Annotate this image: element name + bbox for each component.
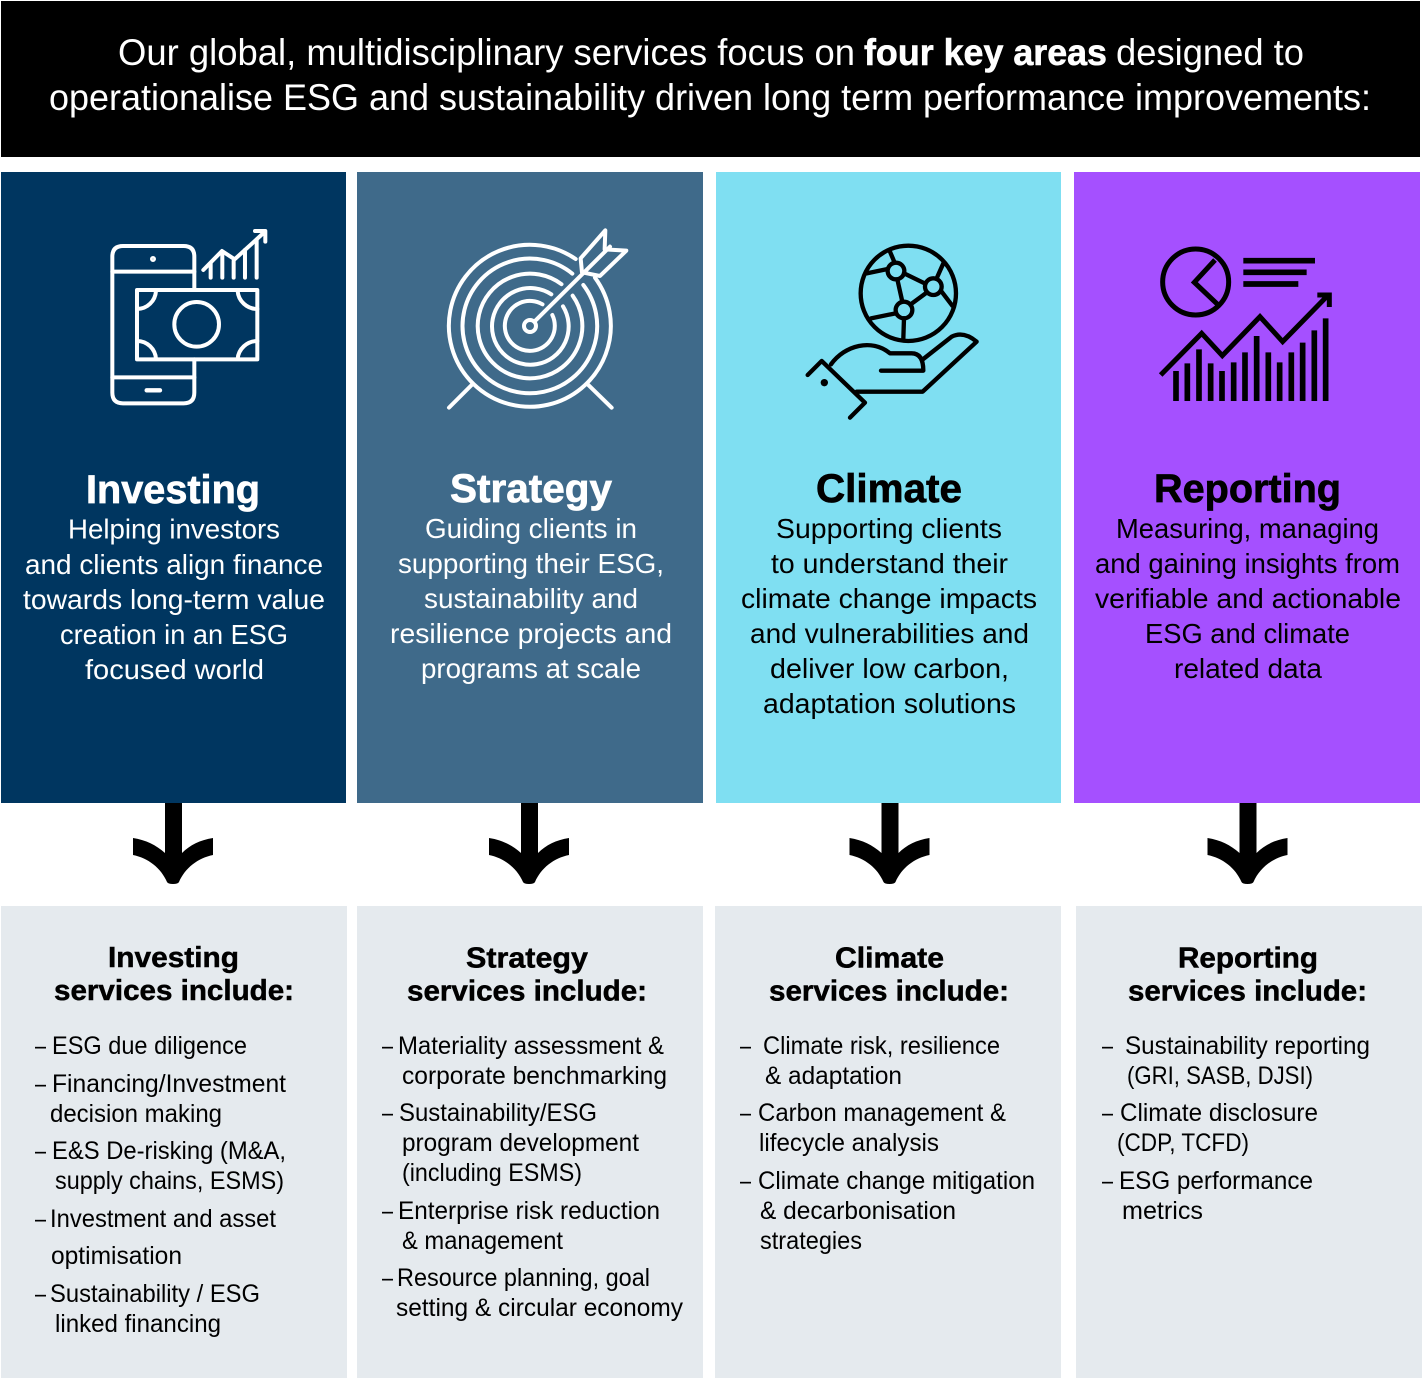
header banner: designed to [1116, 32, 1304, 73]
text: strategy description [390, 513, 672, 684]
text: climate description: to understand their [771, 548, 1008, 579]
panel: investing [1, 172, 346, 803]
text: reporting description: related data [1174, 653, 1322, 684]
arrow: investing [133, 803, 213, 884]
text: investing description: Helping investors [68, 514, 280, 544]
list: investing services: ESG due diligence [52, 1032, 247, 1060]
header banner: four key areas [864, 32, 1107, 73]
list: strategy services: Resource planning, goal [397, 1264, 650, 1292]
list: investing services: Sustainability / ESG [50, 1280, 260, 1308]
list: climate services: Climate risk, resilience [763, 1032, 1000, 1060]
list: climate services: Carbon management & [758, 1099, 1006, 1127]
list: climate services [740, 1032, 1035, 1255]
text: strategy description: sustainability and [424, 583, 638, 614]
list: investing services: linked financing [55, 1310, 221, 1338]
heading: climate services include: services include: [769, 976, 1009, 1008]
heading: reporting services include: Reporting [1178, 942, 1318, 974]
panel: reporting [1074, 172, 1420, 803]
text: investing description: towards long-term value [23, 584, 325, 615]
list: investing services: Financing/Investment [52, 1070, 286, 1098]
heading: strategy services include: Strategy [466, 942, 588, 974]
text: investing description: creation in an ESG [60, 619, 288, 650]
list: strategy services: – [382, 1032, 393, 1060]
list: reporting services [1102, 1032, 1370, 1225]
heading: investing services include: Investing [108, 942, 239, 974]
heading: Investing: Investing [86, 468, 260, 512]
list: reporting services: (CDP, TCFD) [1117, 1129, 1249, 1157]
list: strategy services: – [382, 1264, 393, 1292]
text: strategy description: resilience projects and [390, 618, 672, 649]
list: strategy services: Sustainability/ESG [399, 1099, 597, 1127]
text: investing description: focused world [85, 654, 264, 685]
heading: climate services include: Climate [835, 942, 944, 974]
list: strategy services: program development [402, 1129, 639, 1157]
list: investing services: – [35, 1032, 46, 1060]
heading: Reporting: Reporting [1154, 467, 1341, 511]
text: strategy description: supporting their ESG, [398, 548, 664, 579]
list: reporting services: ESG performance [1119, 1167, 1313, 1195]
list: strategy services [382, 1032, 683, 1322]
text: reporting description: Measuring, managing [1116, 513, 1379, 544]
text: reporting description: ESG and climate [1145, 618, 1350, 649]
panel: climate [716, 172, 1061, 803]
list: strategy services: (including ESMS) [402, 1159, 582, 1187]
list: investing services: optimisation [51, 1242, 182, 1270]
list: investing services: – [35, 1280, 46, 1308]
list: investing services: Investment and asset [50, 1205, 276, 1233]
list: reporting services: metrics [1122, 1197, 1203, 1225]
icon: phone with banknote and chart [112, 231, 265, 403]
text: reporting description [1095, 513, 1401, 684]
heading: climate services include [769, 942, 1009, 1008]
list: investing services: decision making [50, 1100, 222, 1128]
text: reporting description: and gaining insights from [1095, 548, 1400, 579]
arrow: strategy [489, 803, 569, 884]
list: climate services: lifecycle analysis [759, 1129, 939, 1157]
text: climate description: adaptation solutions [763, 688, 1016, 719]
list: climate services: – [740, 1099, 751, 1127]
list: strategy services: Materiality assessment & [398, 1032, 664, 1060]
panel: strategy [357, 172, 703, 803]
heading: reporting services include [1128, 942, 1367, 1008]
icon: target with arrow [449, 230, 626, 408]
list: reporting services: – [1102, 1167, 1113, 1195]
text: investing description [23, 514, 325, 685]
header banner: operationalise ESG and sustainability driven long term performance improvements: [49, 77, 1371, 118]
list: investing services: E&S De-risking (M&A, [52, 1137, 286, 1165]
list: reporting services: Sustainability reporting [1125, 1032, 1370, 1060]
heading: investing services include [54, 942, 294, 1007]
list: climate services: & decarbonisation [760, 1197, 956, 1225]
header banner [1, 1, 1420, 157]
list: strategy services: – [382, 1197, 393, 1225]
list: strategy services: – [382, 1099, 393, 1127]
list: investing services: supply chains, ESMS) [55, 1167, 284, 1195]
panel: reporting services [1076, 906, 1422, 1378]
list: investing services: – [35, 1137, 46, 1165]
text: climate description: Supporting clients [776, 513, 1002, 544]
list: strategy services: Enterprise risk reduction [398, 1197, 660, 1225]
list: investing services: – [35, 1070, 46, 1098]
text: strategy description: Guiding clients in [425, 513, 637, 544]
heading: Strategy: Strategy [450, 467, 613, 511]
text: reporting description: verifiable and actionable [1095, 583, 1401, 614]
list: investing services [35, 1032, 286, 1338]
heading: strategy services include [407, 942, 647, 1008]
list: climate services: – [740, 1167, 751, 1195]
text: investing description: and clients align finance [25, 549, 323, 580]
heading: strategy services include: services include: [407, 976, 647, 1008]
list: climate services: strategies [760, 1227, 862, 1255]
list: strategy services: & management [402, 1227, 563, 1255]
icon: hand holding globe [808, 246, 977, 418]
text: climate description: and vulnerabilities and [750, 618, 1029, 649]
heading: reporting services include: services include: [1128, 976, 1367, 1008]
panel: climate services [715, 906, 1061, 1378]
heading: Climate: Climate [816, 467, 962, 511]
text: climate description [741, 513, 1037, 719]
list: climate services: Climate change mitigation [758, 1167, 1035, 1195]
text: climate description: deliver low carbon, [770, 653, 1009, 684]
list: reporting services: (GRI, SASB, DJSI) [1127, 1062, 1313, 1090]
header banner: Our global, multidisciplinary services focus on [118, 32, 855, 73]
list: reporting services: – [1102, 1032, 1113, 1060]
list: investing services: – [35, 1205, 46, 1233]
panel: strategy services [357, 906, 703, 1378]
list: reporting services: Climate disclosure [1120, 1099, 1318, 1127]
list: reporting services: – [1102, 1099, 1113, 1127]
icon: pie chart and growth chart [1161, 249, 1329, 401]
arrow: reporting [1208, 803, 1288, 884]
list: climate services: & adaptation [765, 1062, 902, 1090]
arrow: climate [850, 803, 930, 884]
list: strategy services: setting & circular economy [396, 1294, 683, 1322]
panel: investing services [1, 906, 347, 1378]
list: climate services: – [740, 1032, 751, 1060]
heading: investing services include: services include: [54, 975, 294, 1007]
list: strategy services: corporate benchmarking [402, 1062, 667, 1090]
text: climate description: climate change impacts [741, 583, 1037, 614]
text: strategy description: programs at scale [421, 653, 641, 684]
